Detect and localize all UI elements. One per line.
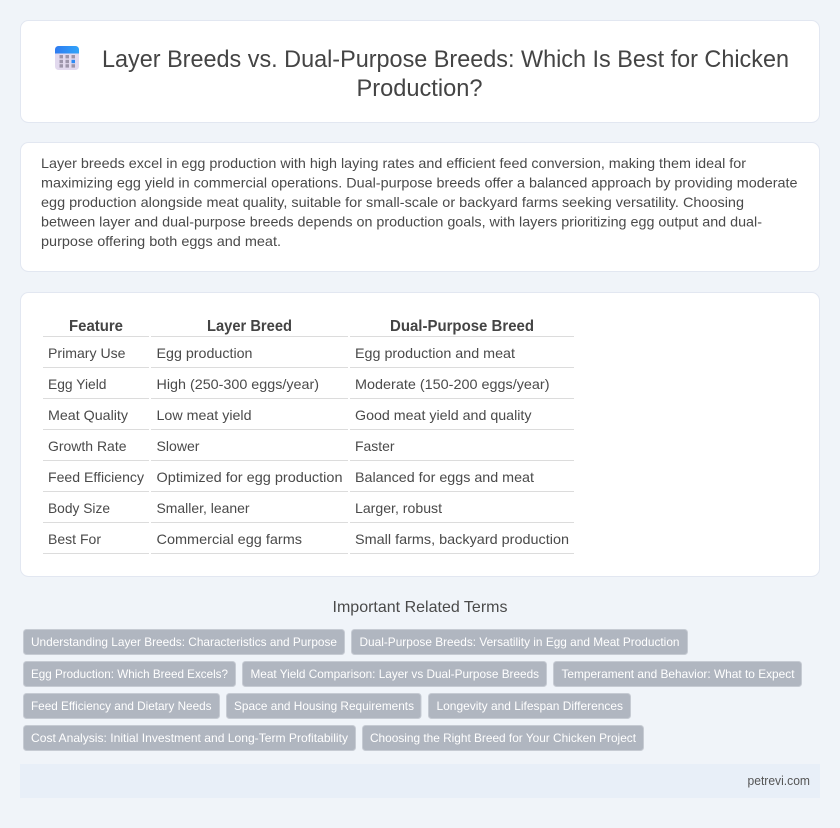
table row: best for: Best For bbox=[48, 531, 101, 547]
tag: cost analysis: Cost Analysis: Initial Investment and Long-Term Profitability bbox=[31, 731, 348, 745]
table header row: Layer Breed bbox=[207, 318, 292, 335]
table row: best for: Small farms, backyard production bbox=[355, 531, 569, 547]
panel: related term tags bbox=[24, 630, 802, 750]
table row: egg yield: Egg Yield bbox=[48, 376, 106, 392]
table row: egg yield bbox=[43, 376, 574, 399]
table row: primary use: Primary Use bbox=[48, 345, 126, 361]
text block: introduction paragraph bbox=[41, 155, 798, 249]
table row: egg yield: High (250-300 eggs/year) bbox=[156, 376, 319, 392]
footer text: site name: petrevi.com bbox=[748, 774, 810, 788]
table row: feed efficiency: Feed Efficiency bbox=[48, 469, 144, 485]
table row: feed efficiency: Balanced for eggs and meat bbox=[355, 469, 534, 485]
table row: meat quality bbox=[43, 407, 574, 430]
heading: important related terms: Important Related Terms bbox=[332, 599, 508, 616]
panel: comparison table bbox=[20, 292, 820, 576]
text block: introduction paragraph: Layer breeds excel in egg production with high laying rates and efficient feed conversion, making them ideal for bbox=[41, 155, 746, 171]
tag: dual-purpose breeds: Dual-Purpose Breeds: Versatility in Egg and Meat Production bbox=[360, 635, 680, 649]
text block: introduction paragraph: between layer and dual-purpose breeds depends on production goals, with layers prioritizing egg output and dual- bbox=[41, 214, 762, 230]
title bbox=[102, 46, 789, 102]
table row: growth rate bbox=[43, 438, 574, 461]
title: Layer Breeds vs. Dual-Purpose Breeds: Which Is Best for Chicken bbox=[102, 46, 789, 73]
tag: temperament and behavior bbox=[554, 662, 802, 686]
table row: egg yield: Moderate (150-200 eggs/year) bbox=[355, 376, 550, 392]
table row: growth rate: Growth Rate bbox=[48, 438, 127, 454]
panel: introduction bbox=[20, 142, 820, 272]
tag: space and housing bbox=[226, 694, 421, 718]
tag: egg production: Egg Production: Which Breed Excels? bbox=[31, 667, 228, 681]
table row: body size bbox=[43, 500, 574, 523]
tag: space and housing: Space and Housing Requirements bbox=[234, 699, 414, 713]
footer bbox=[20, 764, 820, 798]
tag: feed efficiency: Feed Efficiency and Dietary Needs bbox=[31, 699, 212, 713]
tag: understanding layer breeds: Understanding Layer Breeds: Characteristics and Purpose bbox=[31, 635, 337, 649]
title: Production? bbox=[356, 75, 482, 102]
tag: choosing the right breed bbox=[362, 726, 644, 750]
table header row bbox=[43, 318, 574, 337]
icon: calendar bbox=[55, 46, 79, 70]
tag: longevity and lifespan: Longevity and Lifespan Differences bbox=[436, 699, 623, 713]
table row: growth rate: Slower bbox=[156, 438, 200, 454]
table row: best for: Commercial egg farms bbox=[156, 531, 302, 547]
table row: meat quality: Low meat yield bbox=[156, 407, 252, 423]
table row: primary use: Egg production bbox=[156, 345, 252, 361]
tag: understanding layer breeds bbox=[24, 630, 344, 654]
text block: introduction paragraph: maximizing egg yield in commercial operations. Dual-purpose breeds offer a balanced approach by providing moderate bbox=[41, 174, 798, 190]
tag: choosing the right breed: Choosing the Right Breed for Your Chicken Project bbox=[370, 731, 637, 745]
table row: primary use: Egg production and meat bbox=[355, 345, 515, 361]
table row: growth rate: Faster bbox=[355, 438, 395, 454]
tag: cost analysis bbox=[24, 726, 356, 750]
tag: meat yield comparison bbox=[242, 662, 546, 686]
tag: temperament and behavior: Temperament and Behavior: What to Expect bbox=[562, 667, 795, 681]
table row: feed efficiency bbox=[43, 469, 574, 492]
tag: egg production bbox=[24, 662, 236, 686]
tag: dual-purpose breeds bbox=[352, 630, 688, 654]
table row: body size: Body Size bbox=[48, 500, 110, 516]
tag: longevity and lifespan bbox=[428, 694, 630, 718]
text block: introduction paragraph: egg production alongside meat quality, suitable for small-scale or backyard farms seeking versatility. Choosing bbox=[41, 194, 744, 210]
tag: feed efficiency bbox=[24, 694, 220, 718]
table row: body size: Larger, robust bbox=[355, 500, 442, 516]
table row: meat quality: Good meat yield and quality bbox=[355, 407, 532, 423]
table header row: Feature bbox=[69, 318, 123, 335]
table row: body size: Smaller, leaner bbox=[156, 500, 250, 516]
panel: header bbox=[20, 20, 820, 122]
tag: meat yield comparison: Meat Yield Comparison: Layer vs Dual-Purpose Breeds bbox=[250, 667, 539, 681]
table row: primary use bbox=[43, 345, 574, 368]
table header row: Dual-Purpose Breed bbox=[390, 318, 534, 335]
text block: introduction paragraph: purpose offering both eggs and meat. bbox=[41, 233, 281, 249]
table row: best for bbox=[43, 531, 574, 554]
table row: meat quality: Meat Quality bbox=[48, 407, 128, 423]
table row: feed efficiency: Optimized for egg production bbox=[156, 469, 342, 485]
